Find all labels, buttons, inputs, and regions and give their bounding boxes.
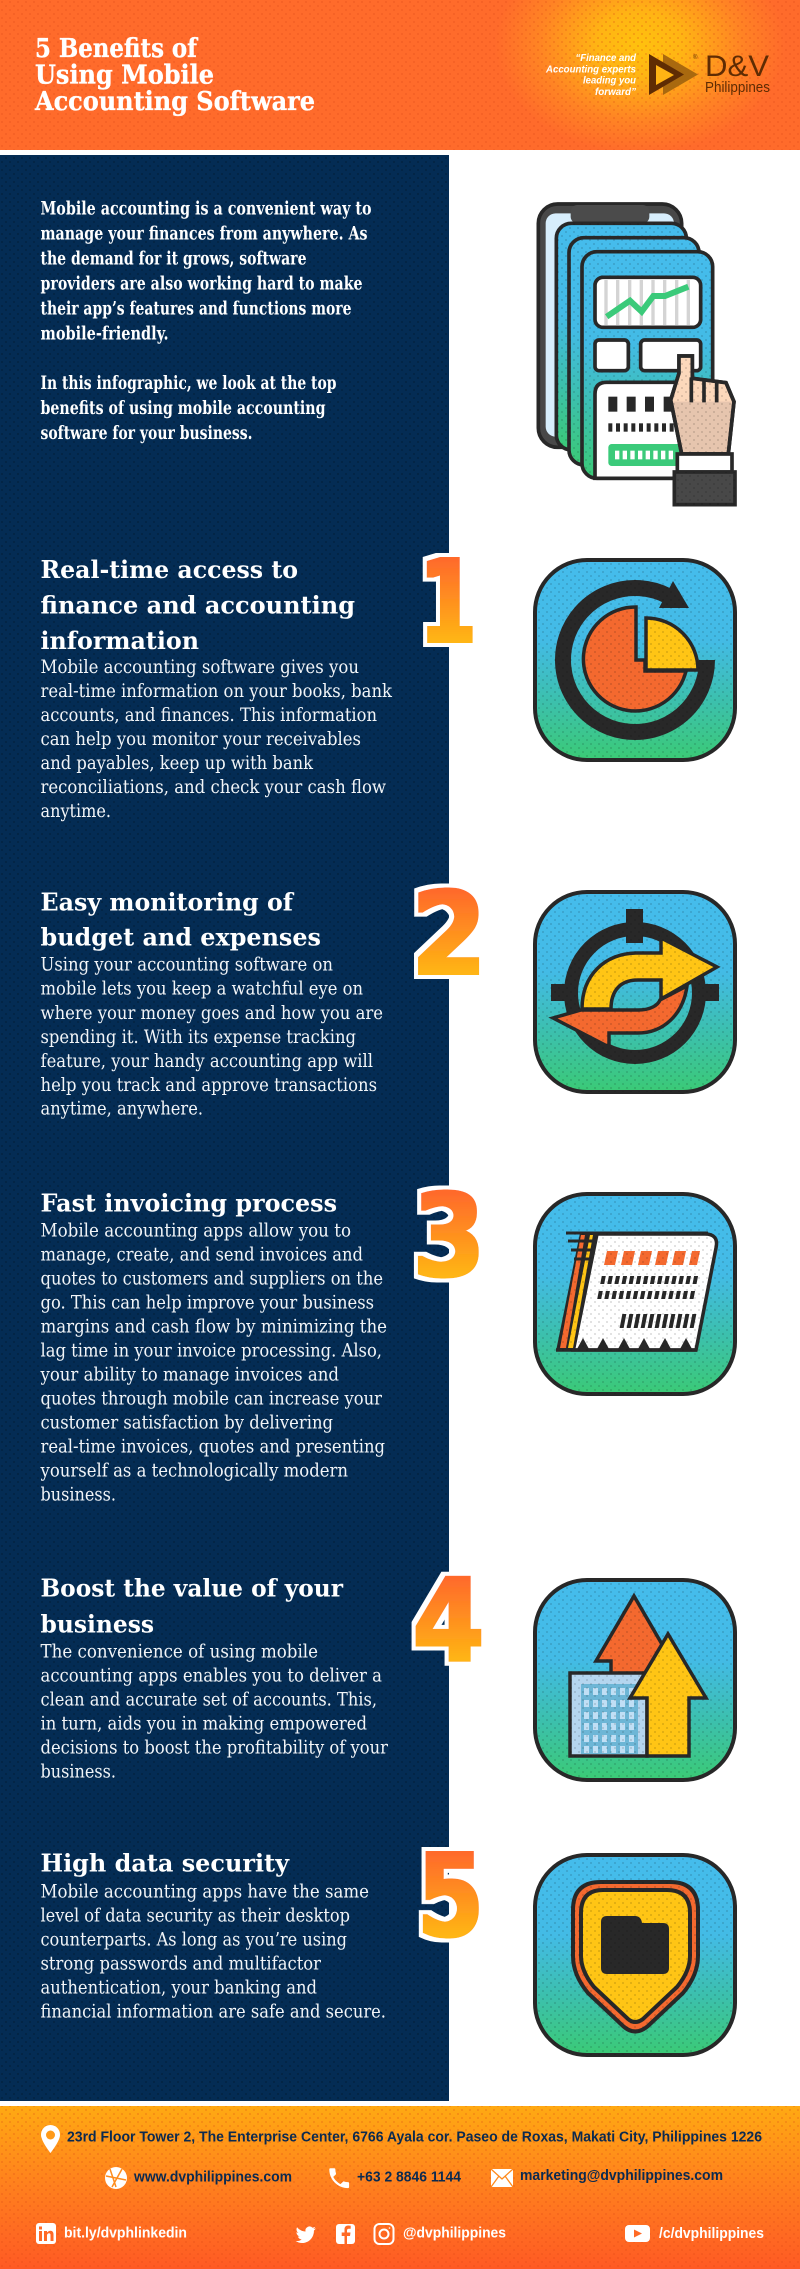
intro text: mobile-friendly. <box>40 323 168 344</box>
body text: authentication, your banking and <box>40 1977 317 1998</box>
body text: and payables, keep up with bank <box>40 753 314 774</box>
title: Using Mobile <box>35 60 214 90</box>
icon: target with cycling arrows <box>535 892 735 1092</box>
body text: reconciliations, and check your cash flow <box>40 777 386 798</box>
body text: business. <box>40 1485 116 1506</box>
body text: your ability to manage invoices and <box>40 1365 339 1386</box>
body text: real-time invoices, quotes and presenting <box>40 1437 385 1458</box>
icon: linkedin <box>36 2223 56 2244</box>
logo: D&V Philippines: D&V <box>705 50 769 83</box>
body text: mobile lets you keep a watchful eye on <box>40 979 363 1000</box>
heading: High data security <box>40 1849 290 1878</box>
intro text: providers are also working hard to make <box>40 273 362 294</box>
body text: real-time information on your books, bank <box>40 681 393 702</box>
header banner <box>0 0 800 150</box>
title <box>34 33 315 117</box>
body text: feature, your handy accounting app will <box>40 1051 373 1072</box>
tagline: forward” <box>595 86 637 98</box>
icon: globe <box>105 2167 127 2189</box>
icon: youtube <box>625 2225 650 2242</box>
tagline <box>545 52 637 98</box>
body text: The convenience of using mobile <box>40 1641 318 1662</box>
heading: information <box>40 626 199 655</box>
number 5: 5 <box>418 1830 484 1964</box>
body text: strong passwords and multifactor <box>40 1953 321 1974</box>
tagline: Accounting experts <box>545 64 636 76</box>
heading: budget and expenses <box>40 922 321 951</box>
logo: D&V Philippines <box>649 50 770 96</box>
icon: phone with hand <box>538 204 735 505</box>
intro text: Mobile accounting is a convenient way to <box>40 198 372 219</box>
logo: D&V Philippines: Philippines <box>705 79 770 96</box>
heading: finance and accounting <box>40 590 355 620</box>
section 4: boost value <box>40 1574 388 1782</box>
body text: customer satisfaction by delivering <box>40 1413 333 1434</box>
title: 5 Benefits of <box>35 33 198 64</box>
body text: accounts, and finances. This information <box>40 705 377 726</box>
phone number: +63 2 8846 1144 <box>357 2170 461 2186</box>
body text: Mobile accounting apps have the same <box>40 1881 369 1902</box>
icon: invoice receipt <box>535 1194 735 1394</box>
body text: counterparts. As long as you’re using <box>40 1929 347 1950</box>
intro text: the demand for it grows, software <box>40 248 306 269</box>
heading: Boost the value of your <box>40 1574 344 1603</box>
body text: Mobile accounting software gives you <box>40 657 359 678</box>
body text: spending it. With its expense tracking <box>40 1027 356 1048</box>
body text: Mobile accounting apps allow you to <box>40 1221 351 1242</box>
body text: anytime, anywhere. <box>40 1099 203 1120</box>
body text <box>40 1641 388 1782</box>
section 5: data security <box>40 1849 386 2022</box>
heading <box>40 1574 344 1638</box>
intro text: software for your business. <box>40 423 252 444</box>
body text <box>40 1881 386 2022</box>
panel: navy text column <box>0 155 449 2101</box>
body text: Using your accounting software on <box>40 955 333 976</box>
website: www.dvphilippines.com <box>133 2170 292 2186</box>
body text: margins and cash flow by minimizing the <box>40 1317 387 1338</box>
body text: yourself as a technologically modern <box>40 1461 348 1482</box>
icon: building with up arrows <box>535 1580 735 1780</box>
number 4: 4 <box>413 1555 484 1689</box>
body text: in turn, aids you in making empowered <box>40 1713 367 1734</box>
heading: business <box>40 1609 154 1638</box>
tagline: “Finance and <box>576 52 637 64</box>
body text: decisions to boost the profitability of your <box>40 1737 388 1758</box>
icon: twitter <box>296 2227 316 2243</box>
icon: facebook <box>336 2224 355 2244</box>
body text: quotes through mobile can increase your <box>40 1389 382 1410</box>
logo: D&V Philippines: ® <box>693 54 698 61</box>
intro text: benefits of using mobile accounting <box>40 398 326 419</box>
body text <box>40 657 393 822</box>
body text: can help you monitor your receivables <box>40 729 361 750</box>
number 1: 1 <box>421 536 475 670</box>
intro text: In this infographic, we look at the top <box>40 373 337 394</box>
heading: Fast invoicing process <box>40 1188 337 1217</box>
footer band <box>0 2106 800 2269</box>
icon: phone <box>329 2168 349 2188</box>
section 2: budget and expenses <box>40 888 383 1120</box>
youtube channel: /c/dvphilippines <box>659 2226 764 2242</box>
body text: clean and accurate set of accounts. This, <box>40 1689 377 1710</box>
body text: quotes to customers and suppliers on the <box>40 1269 383 1290</box>
number 3: 3 <box>413 1170 485 1304</box>
heading: Real-time access to <box>40 555 298 584</box>
body text: anytime. <box>40 801 111 822</box>
icon: mail <box>491 2169 513 2187</box>
body text <box>40 955 383 1120</box>
address: 23rd Floor Tower 2, The Enterprise Center, 6766 Ayala cor. Paseo de Roxas, Makati City, Philippines 1226 <box>67 2130 762 2146</box>
email: marketing@dvphilippines.com <box>520 2168 723 2184</box>
tagline: leading you <box>583 74 637 86</box>
linkedin link: bit.ly/dvphlinkedin <box>64 2226 187 2242</box>
intro text <box>40 198 372 444</box>
body text: level of data security as their desktop <box>40 1905 350 1926</box>
icon: location pin <box>41 2125 60 2153</box>
heading <box>40 555 355 655</box>
body text: go. This can help improve your business <box>40 1293 374 1314</box>
icon: instagram <box>374 2224 394 2244</box>
heading <box>40 888 321 951</box>
body text: lag time in your invoice processing. Also, <box>40 1341 382 1362</box>
body text: financial information are safe and secure. <box>40 2001 386 2022</box>
body text: business. <box>40 1761 116 1782</box>
body text: manage, create, and send invoices and <box>40 1245 363 1266</box>
number 2: 2 <box>412 868 486 1002</box>
icon: shield with folder <box>535 1855 735 2055</box>
body text: help you track and approve transactions <box>40 1075 377 1096</box>
body text: where your money goes and how you are <box>40 1003 383 1024</box>
icon: pie chart with arrow <box>535 560 735 760</box>
intro text: their app’s features and functions more <box>40 298 352 319</box>
section 3: fast invoicing <box>40 1188 387 1506</box>
heading: Easy monitoring of <box>40 888 294 917</box>
title: Accounting Software <box>34 86 315 117</box>
body text: accounting apps enables you to deliver a <box>40 1665 382 1686</box>
body text <box>40 1221 387 1506</box>
section 1: real-time access <box>40 555 393 822</box>
intro text: manage your finances from anywhere. As <box>40 223 368 244</box>
instagram and twitter handle: @dvphilippines <box>403 2226 506 2242</box>
